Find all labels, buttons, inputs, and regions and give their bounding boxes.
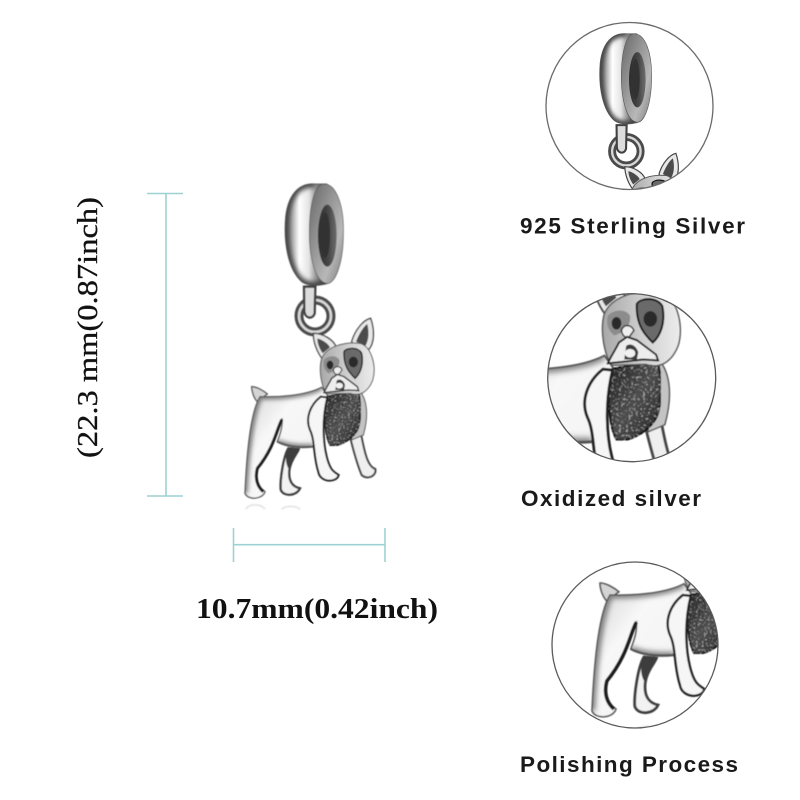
label: 925 Sterling Silver: 925 Sterling Silver (520, 214, 745, 238)
width dimension line (234, 528, 385, 562)
detail circle: ring and bail (545, 22, 714, 190)
detail circle: oxidized head and chest (547, 293, 716, 462)
main product: dog charm (245, 184, 375, 509)
height label: (22.3 mm(0.87inch) (72, 197, 104, 458)
label: Oxidized silver: Oxidized silver (521, 486, 701, 511)
detail circle: polished body (551, 561, 719, 729)
height dimension line (147, 194, 183, 496)
label: Polishing Process: Polishing Process (520, 752, 738, 777)
width label: 10.7mm(0.42inch) (196, 594, 438, 625)
